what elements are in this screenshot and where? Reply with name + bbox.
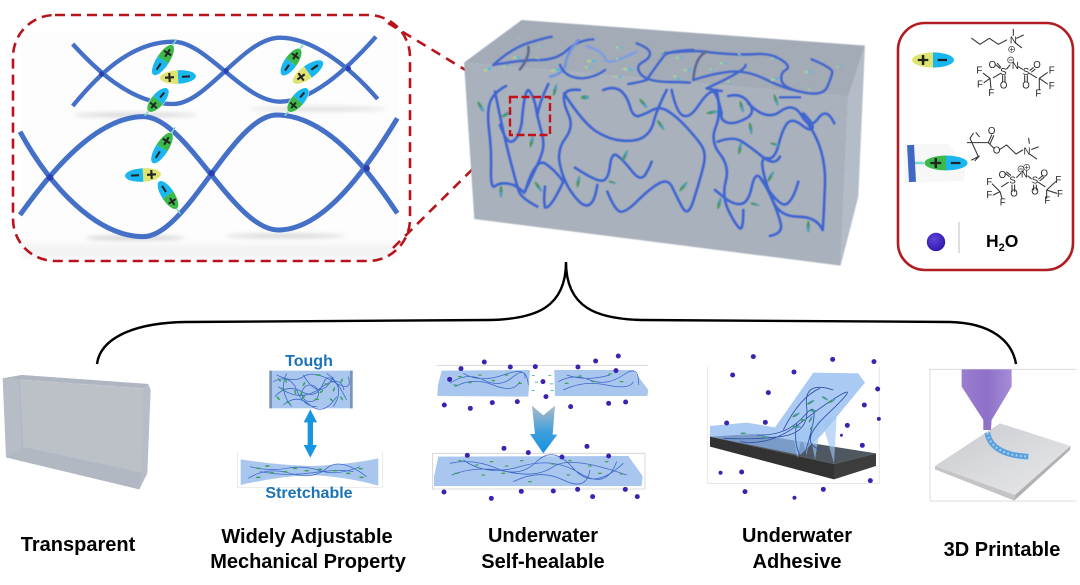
label: adhesive: Adhesive bbox=[753, 551, 841, 573]
chemical structure: polymer ionic liquid: N bbox=[1023, 146, 1030, 157]
chemical structure: polymer ionic liquid: F bbox=[1055, 175, 1061, 186]
chemical structure: polymer ionic liquid: S bbox=[1032, 176, 1038, 187]
panel: tough and stretchable samples bbox=[237, 371, 383, 487]
chemical structure: polymer ionic liquid: O bbox=[1041, 168, 1049, 179]
panel: 3D printing bbox=[930, 369, 1077, 501]
chemical structure: polymer ionic liquid: O bbox=[1010, 188, 1018, 199]
front network bbox=[488, 84, 834, 236]
chemical structure: polymer ionic liquid: O bbox=[1031, 187, 1039, 198]
block faces bbox=[464, 20, 865, 266]
chemical structure: ionic liquid: S bbox=[1000, 67, 1007, 78]
curly brace linking to properties bbox=[97, 262, 1016, 364]
small dashed selection square bbox=[510, 97, 550, 135]
build plate bbox=[935, 423, 1071, 495]
label: 3D printable: 3D Printable bbox=[944, 539, 1060, 561]
chemical structure: polymer ionic liquid: O bbox=[993, 146, 1001, 157]
small ions in block bbox=[476, 38, 843, 233]
chemical structure: ionic liquid: O bbox=[1000, 80, 1008, 91]
label: self-healable: Underwater bbox=[488, 525, 598, 547]
water label: H bbox=[986, 231, 999, 251]
tough sample bbox=[269, 371, 353, 409]
zoom connector lines bbox=[388, 23, 510, 248]
icon: tethered ion pair bbox=[903, 144, 968, 183]
adhesive network bbox=[723, 387, 847, 455]
label: self-healable: Self-healable bbox=[481, 551, 605, 573]
chemical structure: ionic liquid: F bbox=[1049, 81, 1055, 92]
healed strip bbox=[432, 453, 645, 489]
panel: transparent slab bbox=[3, 375, 151, 489]
chemical structure: ionic liquid: F bbox=[977, 79, 983, 90]
water label: 2 bbox=[999, 242, 1005, 254]
inset backdrop bbox=[20, 32, 398, 261]
chemical structure: ionic liquid: F bbox=[1049, 66, 1055, 77]
chemical structure: ionic liquid: N bbox=[1012, 61, 1019, 72]
chemical structure: ionic liquid bbox=[972, 29, 1055, 99]
chemical structure: ionic liquid: O bbox=[989, 60, 997, 71]
chemical structure: polymer ionic liquid bbox=[967, 126, 1063, 209]
inset dashed frame bbox=[13, 15, 410, 261]
stretched fibrils bbox=[793, 417, 837, 463]
chemical structure: polymer ionic liquid: F bbox=[1000, 198, 1006, 209]
icon: free ion pair bbox=[911, 51, 955, 69]
chemical structure: polymer ionic liquid: F bbox=[1044, 196, 1050, 207]
label: transparent: Transparent bbox=[21, 534, 136, 556]
separated strips bbox=[437, 365, 648, 397]
nozzle bbox=[962, 369, 1012, 430]
stretchable label: Stretchable bbox=[265, 485, 353, 502]
double arrow bbox=[304, 409, 317, 458]
panel: underwater self-healing bbox=[432, 353, 648, 501]
label: adhesive: Underwater bbox=[742, 525, 852, 547]
panel: underwater adhesive bbox=[707, 354, 881, 500]
chemical structure: ionic liquid: O bbox=[1022, 80, 1030, 91]
legend frame bbox=[898, 23, 1073, 270]
panel: legend of chemical components bbox=[898, 23, 1073, 270]
stretchable sample bbox=[237, 452, 383, 487]
water dots bbox=[441, 353, 640, 501]
top network bbox=[493, 37, 832, 97]
ion pairs in inset bbox=[124, 35, 328, 218]
chemical structure: polymer ionic liquid: O bbox=[988, 126, 996, 137]
substrate bbox=[710, 434, 876, 464]
panel: hydrogel block with polymer network bbox=[464, 20, 865, 266]
chemical structure: ionic liquid: N bbox=[1010, 35, 1017, 46]
chemical structure: ionic liquid: F bbox=[988, 88, 994, 99]
chemical structure: polymer ionic liquid: F bbox=[986, 177, 992, 188]
water dots bbox=[719, 354, 881, 500]
chemical structure: polymer ionic liquid: F bbox=[1057, 189, 1063, 200]
healing arrow bbox=[530, 406, 557, 453]
tough label: Tough bbox=[285, 353, 333, 370]
network strands bbox=[20, 37, 397, 237]
chemical structure: polymer ionic liquid: S bbox=[1009, 176, 1016, 187]
chemical structure: ionic liquid: S bbox=[1023, 67, 1029, 78]
chemical structure: ionic liquid: O bbox=[1033, 60, 1041, 71]
chemical structure: ionic liquid: F bbox=[976, 66, 982, 77]
label: mechanical property: Widely Adjustable bbox=[221, 526, 393, 548]
chemical structure: polymer ionic liquid: O bbox=[999, 170, 1007, 181]
label: mechanical property: Mechanical Property bbox=[210, 551, 407, 573]
printed filament bbox=[987, 433, 1028, 457]
chemical structure: ionic liquid: F bbox=[1035, 88, 1041, 99]
icon: water sphere bbox=[927, 233, 945, 251]
chemical structure: polymer ionic liquid: N bbox=[1021, 170, 1028, 181]
panel: magnified inset of polymer network bbox=[13, 15, 410, 261]
peeled film bbox=[710, 373, 865, 455]
chemical structure: polymer ionic liquid: F bbox=[986, 190, 992, 201]
water label: O bbox=[1005, 231, 1018, 251]
